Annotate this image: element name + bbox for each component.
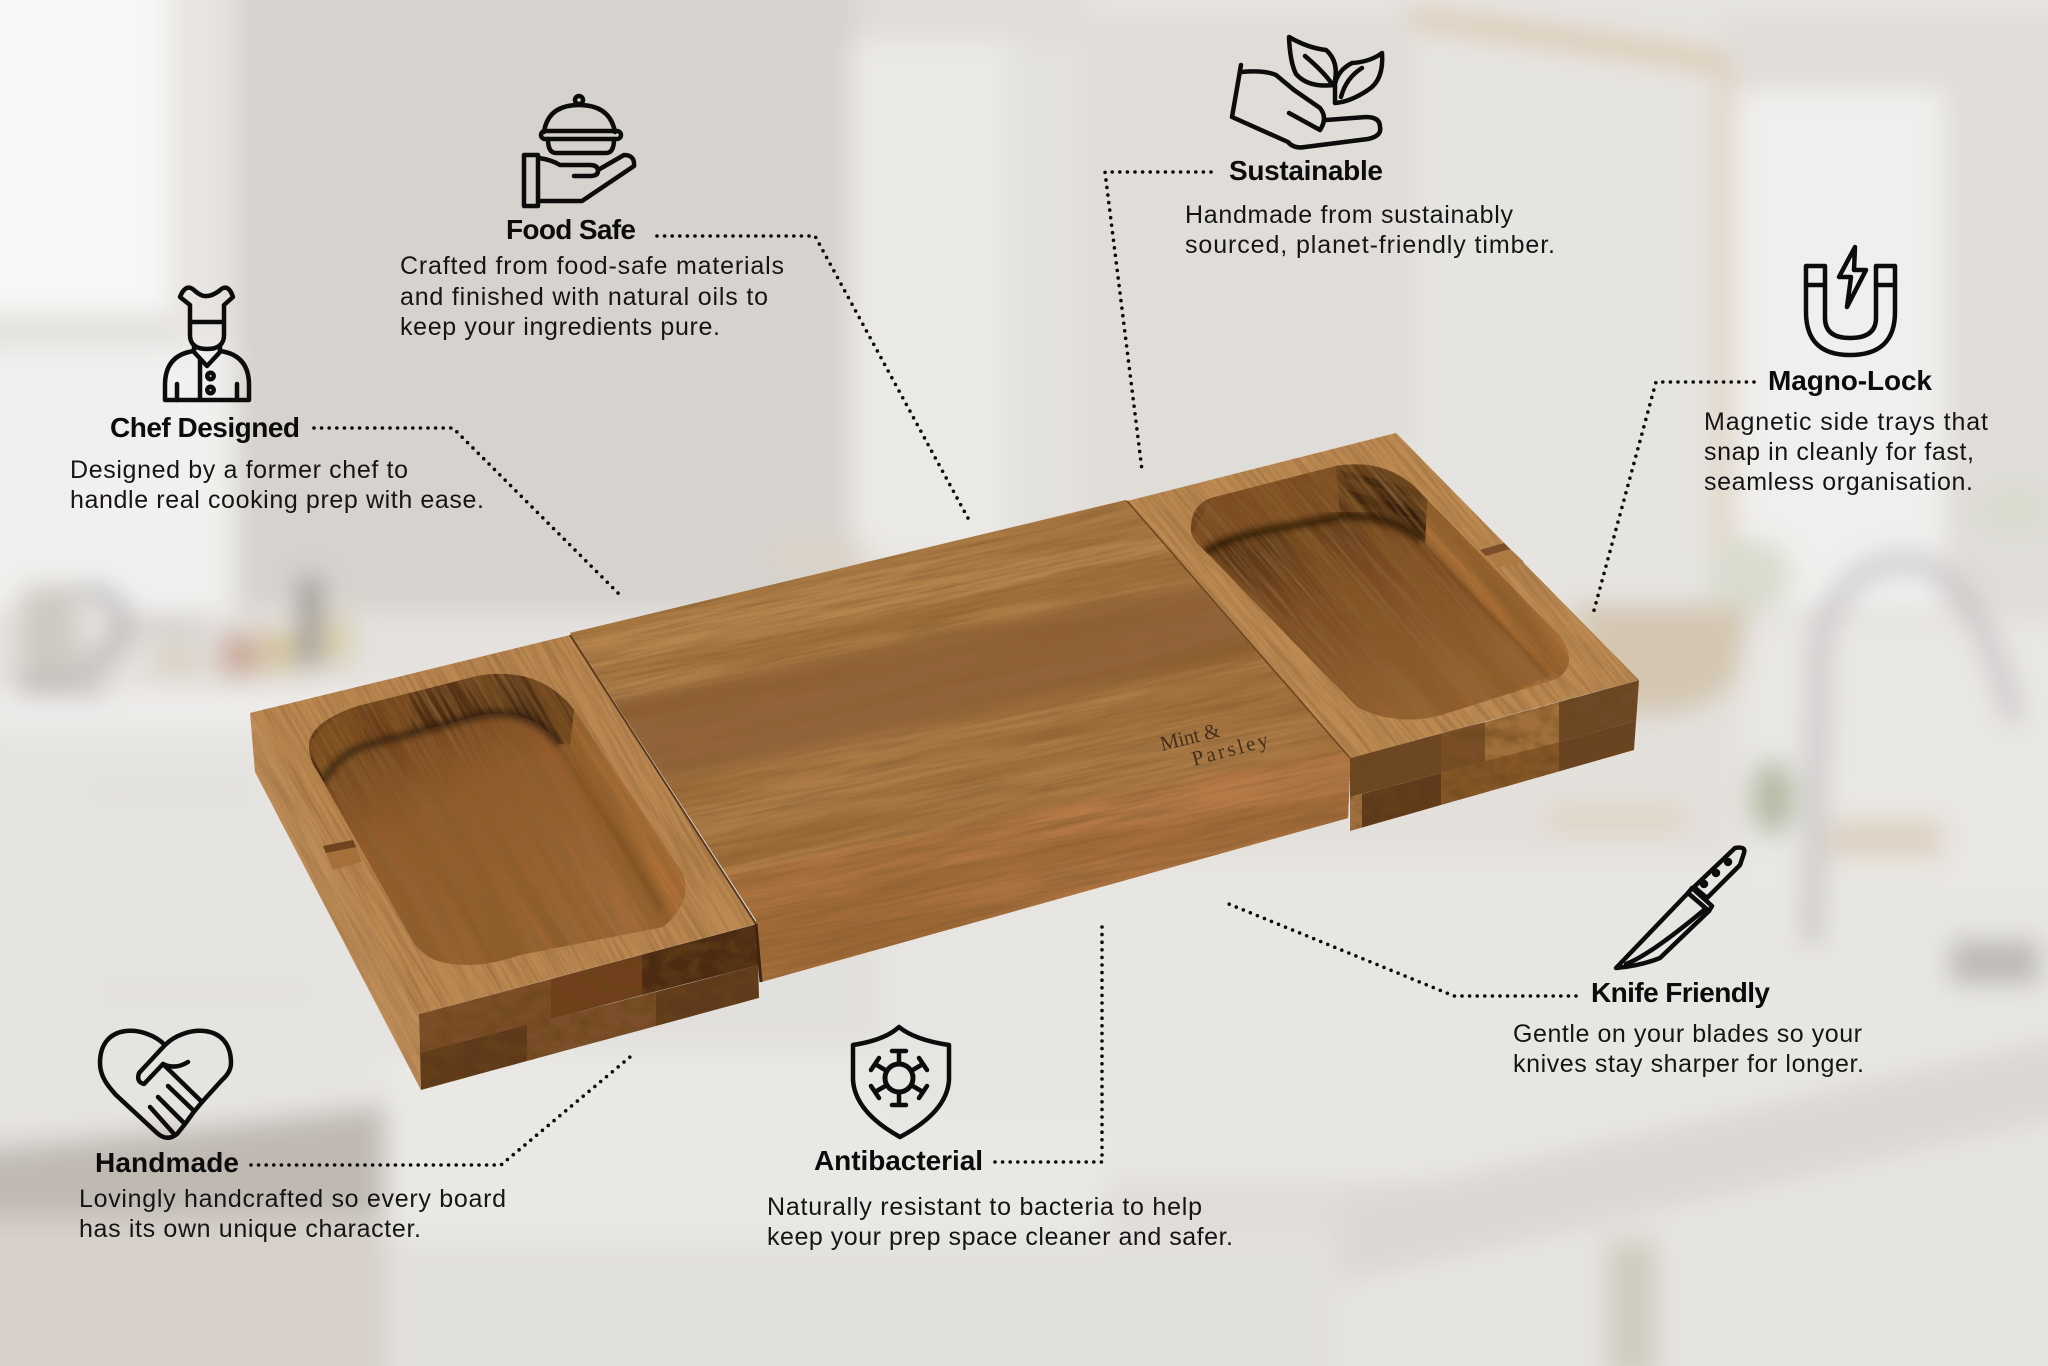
icon: shield with bacteria xyxy=(853,1027,949,1137)
description: Knife Friendly: Gentle on your blades so your xyxy=(1513,1020,1862,1048)
callout: Handmade xyxy=(79,1031,630,1243)
connector: Magno-Lock xyxy=(1593,382,1754,614)
description: Sustainable xyxy=(1185,201,1555,259)
heading: Chef Designed: Chef Designed xyxy=(110,412,300,443)
callout: Chef Designed xyxy=(70,288,621,596)
connector: Food Safe xyxy=(657,236,969,520)
heading: Handmade: Handmade xyxy=(95,1147,239,1178)
brand mark: Parsley xyxy=(1189,727,1271,771)
callout: Sustainable xyxy=(1105,37,1555,470)
callout: Food Safe xyxy=(400,96,969,520)
description: Magno-Lock: seamless organisation. xyxy=(1704,468,1973,496)
description: Sustainable: sourced, planet-friendly timber. xyxy=(1185,231,1555,259)
description: Antibacterial: keep your prep space cleaner and safer. xyxy=(767,1223,1233,1251)
callout: Magno-Lock xyxy=(1593,247,1988,614)
description: Knife Friendly: knives stay sharper for longer. xyxy=(1513,1050,1864,1078)
icon: hand with leaves xyxy=(1232,37,1382,147)
description: Antibacterial xyxy=(767,1193,1233,1251)
brand mark xyxy=(1157,718,1271,771)
center chopping board xyxy=(570,500,1351,982)
left tray xyxy=(0,230,1081,1366)
heading: Knife Friendly: Knife Friendly xyxy=(1591,977,1770,1008)
product: wooden chopping board with trays xyxy=(98,36,1855,1166)
icon: chef knife xyxy=(1616,848,1744,968)
description: Antibacterial: Naturally resistant to bacteria to help xyxy=(767,1193,1202,1221)
description: Food Safe: keep your ingredients pure. xyxy=(400,313,720,341)
description: Food Safe: and finished with natural oils to xyxy=(400,283,768,311)
description: Sustainable: Handmade from sustainably xyxy=(1185,201,1514,229)
description: Handmade xyxy=(79,1185,506,1243)
description: Magno-Lock: snap in cleanly for fast, xyxy=(1704,438,1974,466)
description: Food Safe xyxy=(400,252,784,341)
left tray notch xyxy=(323,840,362,870)
heading: Sustainable: Sustainable xyxy=(1229,155,1383,186)
connector: Chef Designed xyxy=(314,428,621,596)
right tray notch xyxy=(1480,543,1524,567)
right tray cavity xyxy=(1190,464,1570,720)
description: Chef Designed: handle real cooking prep with ease. xyxy=(70,486,484,514)
right tray end grain xyxy=(1350,680,1639,831)
left tray end grain xyxy=(419,924,759,1090)
description: Knife Friendly xyxy=(1513,1020,1864,1078)
description: Chef Designed xyxy=(70,456,484,514)
heading: Antibacterial: Antibacterial xyxy=(814,1145,983,1176)
left tray cavity xyxy=(309,674,686,965)
connector: Knife Friendly xyxy=(1224,902,1576,996)
callout: Antibacterial xyxy=(767,921,1233,1251)
description: Chef Designed: Designed by a former chef to xyxy=(70,456,408,484)
connector: Antibacterial xyxy=(995,921,1102,1162)
description: Handmade: has its own unique character. xyxy=(79,1215,421,1243)
icon: serving hand with cloche xyxy=(524,96,634,206)
description: Food Safe: Crafted from food-safe materials xyxy=(400,252,784,280)
icon: chef xyxy=(165,288,249,400)
connector: Sustainable xyxy=(1105,172,1211,470)
callout: Knife Friendly xyxy=(1224,848,1864,1078)
heading: Magno-Lock: Magno-Lock xyxy=(1768,365,1932,396)
description: Magno-Lock: Magnetic side trays that xyxy=(1704,408,1988,436)
description: Magno-Lock xyxy=(1704,408,1988,496)
icon: magnet with bolt xyxy=(1806,247,1895,355)
description: Handmade: Lovingly handcrafted so every board xyxy=(79,1185,506,1213)
heading: Food Safe: Food Safe xyxy=(506,214,636,245)
right tray xyxy=(1126,433,1639,831)
icon: heart handshake xyxy=(100,1031,231,1138)
connector: Handmade xyxy=(251,1057,630,1165)
brand mark: Mint & xyxy=(1157,718,1222,756)
